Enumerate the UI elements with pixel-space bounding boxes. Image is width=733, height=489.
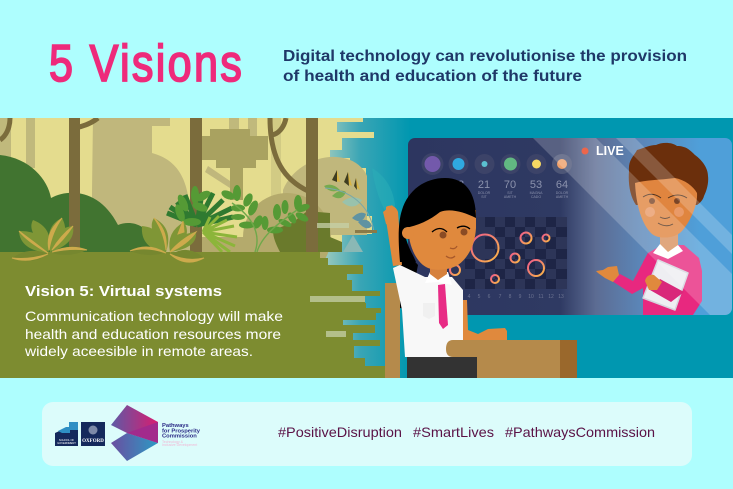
face [408,210,476,270]
stat dots and numbers: AMETH [556,195,569,199]
stat dots and numbers: 21 [478,179,490,191]
stat dots and numbers: DOLOR [478,191,491,195]
student [383,178,507,378]
soft transition streaks [310,223,365,337]
video screen [408,138,732,315]
presenter holding hand [645,275,662,290]
subtitle: Digital technology can revolutionise the provision [283,48,687,65]
presenter arm [612,253,648,294]
tablet [643,260,688,310]
student ponytail [400,262,418,308]
checker chart: 12 [548,294,554,300]
vision description [24,308,283,359]
chair [385,283,400,378]
desk [446,340,577,378]
vision description: health and education resources more [25,326,281,342]
logo: Blavatnik School of Government: GOVERNMENT [57,441,76,445]
stat dots and numbers: SIT [507,191,514,195]
logo text: Inclusive Development [162,443,197,447]
stat dots and numbers: SIT [481,195,488,199]
stat dots and numbers: DOLOR [556,191,569,195]
tree trunks [69,118,80,252]
logo text: Pathways [162,423,189,429]
illustration scene [0,118,733,378]
logo text [162,423,201,447]
stat dots and numbers: AMETH [504,195,517,199]
stat dots and numbers: CADO [531,195,541,199]
stat dots and numbers: 70 [504,179,516,191]
forearm over tablet [650,279,684,302]
faded teal leaf [382,178,395,210]
logo text: for Prosperity [162,428,201,434]
pocket [423,303,435,319]
checker chart: 9 [519,294,522,300]
logo text: Technology & [162,440,184,444]
olive ground [0,252,385,378]
stat dots and numbers: MAGNA [530,191,543,195]
checker chart: 6 [488,294,491,300]
hair [399,178,476,262]
trousers [407,357,477,378]
light fan palm [203,216,237,252]
hashtags [278,424,655,440]
faded plant at the transition [324,170,377,252]
checker chart: 5 [478,294,481,300]
plant: right bush [130,218,204,262]
stat dots and numbers: 58 [452,179,464,191]
stat dots and numbers: 53 [530,179,542,191]
logo: Pathways for Prosperity Commission mark [111,405,158,461]
logo: Blavatnik School of Government: SCHOOL OF [59,438,75,442]
checker chart [450,217,567,300]
student raised arm [386,206,402,266]
teal background [410,118,733,378]
dark olive bush [273,212,342,252]
logo: University of Oxford: OXFORD [82,439,104,444]
glass reflection [533,138,732,315]
tie [438,284,448,329]
stat dots and numbers [422,153,572,199]
shirt [393,265,463,357]
sweater [643,245,702,315]
hashtags: #PathwaysCommission [505,424,655,440]
live indicator: LIVE [596,144,624,158]
checker chart: 10 [528,294,534,300]
hair [629,143,708,205]
dark green bushes [0,155,155,252]
forest backdrop [0,118,374,258]
hanging vines [0,118,308,191]
checker chart: 4 [468,294,471,300]
vision description: Communication technology will make [25,308,283,324]
forearm on desk [463,300,507,341]
subtitle [283,48,687,85]
logo: University of Oxford [81,422,105,446]
title: 5 Visions [49,35,244,93]
palm leaves [173,185,311,234]
logo: Blavatnik School of Government [55,422,78,446]
stat dots and numbers: 64 [556,179,568,191]
logo text: Commission [162,434,197,440]
plant: left bush [12,218,87,261]
hashtags: #PositiveDisruption [278,424,402,440]
face [635,178,697,238]
checker chart: 11 [538,294,544,300]
vision description: widely aceesible in remote areas. [24,343,253,359]
fan palm [167,193,233,225]
hashtags: #SmartLives [413,424,494,440]
checker chart: 8 [509,294,512,300]
vision heading: Vision 5: Virtual systems [25,283,222,300]
footer panel [42,402,692,466]
presenter pointing hand [596,266,619,282]
presenter [533,138,732,315]
collar [653,244,683,259]
live indicator [582,146,624,155]
subtitle: of health and education of the future [283,68,582,85]
checker chart: 7 [499,294,502,300]
neck [660,234,678,252]
checker chart: 13 [558,294,564,300]
